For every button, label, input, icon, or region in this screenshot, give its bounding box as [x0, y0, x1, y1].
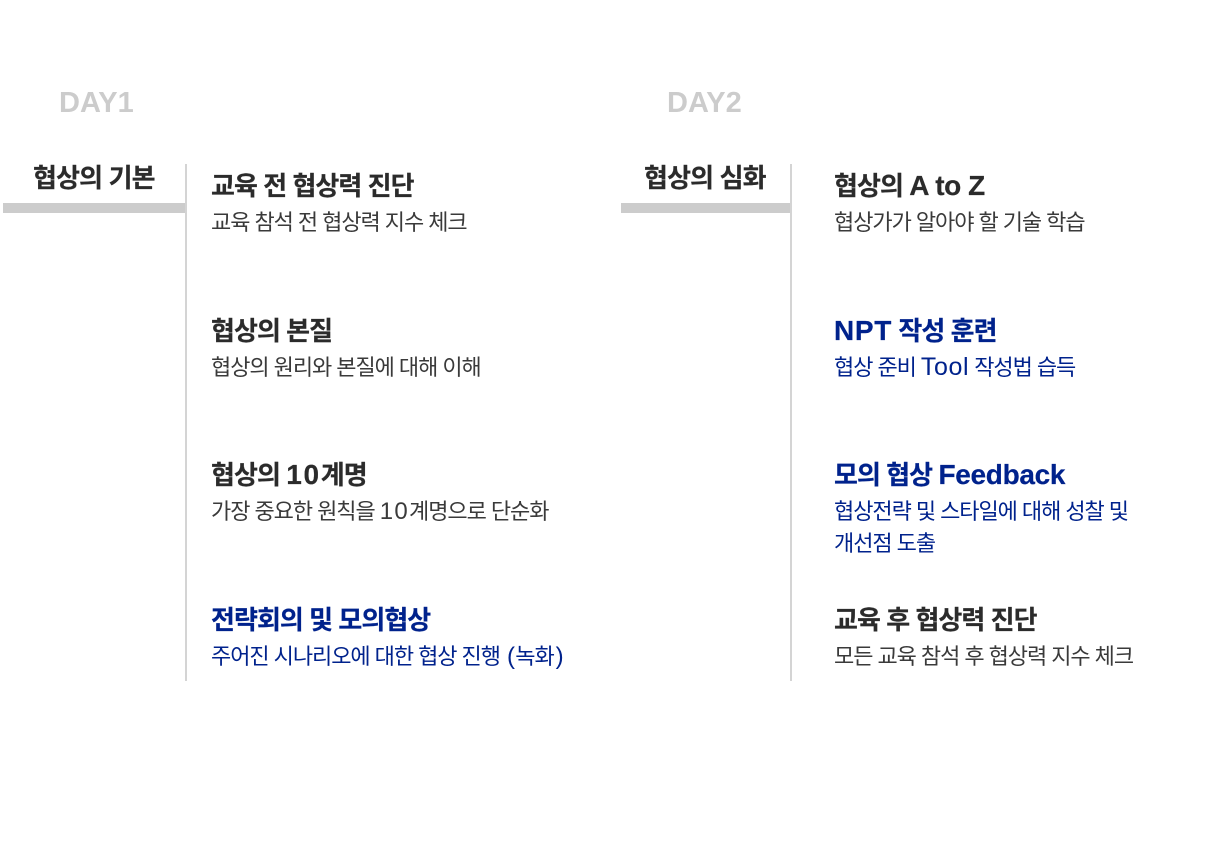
day 1 item 3	[211, 459, 549, 525]
day 1 item 1: 교육 전 협상력 진단	[211, 171, 414, 201]
day 2 timeline line	[790, 164, 792, 681]
day 1 item 1: 교육 참석 전 협상력 지수 체크	[211, 210, 467, 235]
day 1 item 2: 협상의 본질	[211, 316, 332, 346]
day 2 item 4	[834, 605, 1133, 669]
day 2 item 4: 모든 교육 참석 후 협상력 지수 체크	[834, 644, 1133, 669]
day 2 item 3: 모의 협상 Feedback	[834, 459, 1065, 490]
day 2 item 1	[834, 170, 1085, 235]
day 2 heading underline	[621, 203, 790, 213]
day 2 label: DAY2	[667, 87, 742, 119]
day 1 timeline line	[185, 164, 187, 681]
day 1 item 1	[211, 171, 467, 235]
day 1 item 2	[211, 316, 481, 380]
day 1 label: DAY1	[59, 87, 134, 119]
day 1 heading underline	[3, 203, 186, 213]
day 2 item 2	[834, 315, 1076, 381]
day 2 item 2: NPT 작성 훈련	[834, 315, 997, 346]
day 1 item 4	[211, 605, 564, 670]
day 1 item 3: 가장 중요한 원칙을 10계명으로 단순화	[211, 498, 548, 525]
day 1 item 4: 전략회의 및 모의협상	[211, 605, 430, 635]
day 2 item 3	[834, 459, 1128, 556]
day 1 item 4: 주어진 시나리오에 대한 협상 진행 (녹화)	[211, 643, 564, 670]
day 2 item 1: 협상의 A to Z	[834, 170, 985, 201]
day 2 item 1: 협상가가 알아야 할 기술 학습	[834, 210, 1085, 235]
day 2 item 3: 개선점 도출	[834, 531, 935, 556]
day 1 item 3: 협상의 10계명	[211, 459, 367, 490]
day 2 section heading: 협상의 심화	[644, 163, 766, 193]
day 2 item 4: 교육 후 협상력 진단	[834, 605, 1037, 635]
day 2 item 3: 협상전략 및 스타일에 대해 성찰 및	[834, 499, 1128, 524]
day 2 item 2: 협상 준비 Tool 작성법 습득	[834, 353, 1075, 381]
day 1 section heading: 협상의 기본	[33, 163, 155, 193]
day 1 item 2: 협상의 원리와 본질에 대해 이해	[211, 355, 481, 380]
